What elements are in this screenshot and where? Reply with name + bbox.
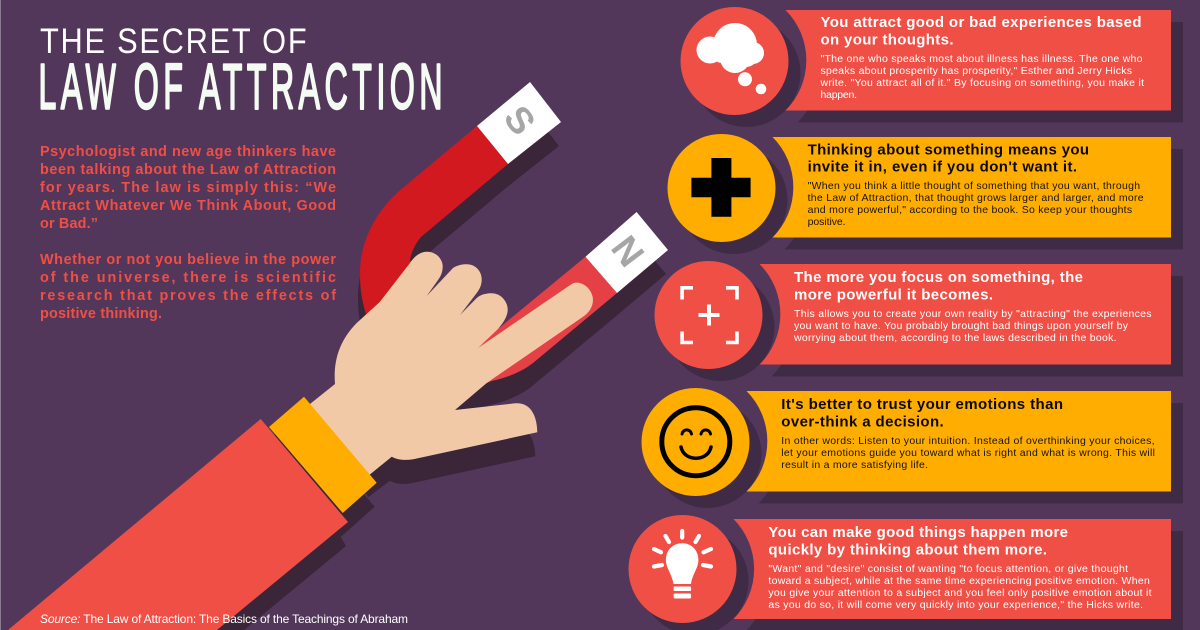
description: let your emotions guide you toward what is right and what is wrong. This will bbox=[781, 447, 1155, 459]
heading: It's better to trust your emotions than bbox=[781, 396, 1063, 413]
description bbox=[793, 308, 1152, 344]
description: as you do so, it will come very quickly into your experience," the Hicks write. bbox=[768, 599, 1143, 611]
panel: happen quickly bbox=[628, 515, 1183, 630]
heading: quickly by thinking about them more. bbox=[768, 542, 1047, 558]
panel: emotions bbox=[642, 388, 1183, 508]
text block: introduction: Attract Whatever We Think About, Good bbox=[40, 198, 336, 214]
heading bbox=[768, 524, 1068, 558]
illustration shadow bbox=[6, 106, 666, 630]
heading: Thinking about something means you bbox=[808, 142, 1089, 158]
text block: introduction: for years. The law is simply this: “We bbox=[40, 180, 336, 196]
magnet south cap bbox=[477, 82, 561, 164]
heading: more powerful it becomes. bbox=[794, 286, 993, 304]
icon: light bulb bbox=[654, 531, 711, 598]
description: positive. bbox=[808, 216, 846, 228]
description bbox=[820, 53, 1144, 101]
icon: smiley bbox=[662, 408, 730, 476]
description bbox=[781, 435, 1155, 471]
magnet bbox=[360, 82, 668, 390]
heading: invite it in, even if you don't want it. bbox=[808, 158, 1077, 176]
description: toward a subject, while at the same time experiencing positive emotion. When bbox=[768, 575, 1150, 587]
heading bbox=[808, 142, 1089, 176]
title: THE SECRET OF bbox=[40, 21, 307, 60]
source note: Source: The Law of Attraction: The Basics of the Teachings of Abraham bbox=[40, 612, 408, 626]
heading bbox=[820, 14, 1142, 48]
magnet north cap: N bbox=[603, 228, 652, 274]
text block: introduction: been talking about the Law of Attraction bbox=[40, 162, 336, 178]
description: speaks about prosperity has prosperity," Esther and Jerry Hicks bbox=[820, 65, 1132, 77]
title: LAW OF ATTRACTION bbox=[38, 50, 442, 123]
description: and more powerful," according to the book. So keep your thoughts bbox=[808, 204, 1132, 216]
heading bbox=[794, 269, 1083, 304]
description bbox=[768, 563, 1152, 611]
icon: plus bbox=[691, 158, 751, 217]
description: "The one who speaks most about illness has illness. The one who bbox=[820, 53, 1143, 65]
heading: You can make good things happen more bbox=[768, 524, 1068, 541]
heading: on your thoughts. bbox=[820, 32, 954, 48]
heading bbox=[781, 396, 1063, 430]
description: the Law of Attraction, that thought grows larger and larger, and more bbox=[808, 192, 1144, 204]
text block: introduction: or Bad.” bbox=[40, 216, 98, 232]
panel: focus bbox=[654, 261, 1183, 381]
description: you give your attention to a subject and you feel only positive emotion about it bbox=[768, 587, 1152, 599]
panel: invite bbox=[668, 134, 1183, 254]
heading: The more you focus on something, the bbox=[794, 269, 1083, 286]
magnet south cap: S bbox=[496, 98, 543, 142]
text block: introduction: of the universe, there is scientific bbox=[40, 270, 336, 286]
text block: introduction: Whether or not you believe in the power bbox=[40, 252, 336, 268]
description: "When you think a little thought of something that you want, through bbox=[808, 180, 1140, 192]
icon: thought cloud bbox=[696, 23, 766, 94]
magnet lower arm bbox=[470, 257, 617, 390]
description: happen. bbox=[820, 89, 857, 101]
heading: You attract good or bad experiences based bbox=[820, 14, 1142, 31]
description bbox=[808, 180, 1144, 228]
text block: introduction: positive thinking. bbox=[40, 306, 162, 322]
description: In other words: Listen to your intuition. Instead of overthinking your choices, bbox=[781, 435, 1155, 447]
text block: introduction: Psychologist and new age thinkers have bbox=[40, 144, 336, 160]
description: result in a more satisfying life. bbox=[781, 459, 928, 471]
magnet upper arm bbox=[360, 126, 508, 325]
magnet north cap bbox=[586, 212, 668, 293]
text block: introduction bbox=[40, 144, 336, 322]
description: This allows you to create your own reality by "attracting" the experiences bbox=[794, 308, 1152, 320]
description: worrying about them, according to the laws described in the book. bbox=[793, 332, 1116, 344]
panel: thoughts bbox=[680, 7, 1183, 127]
icon: focus frame bbox=[682, 288, 737, 342]
cuff bbox=[269, 397, 377, 513]
text block: introduction: research that proves the effects of bbox=[40, 288, 336, 304]
sleeve bbox=[8, 419, 348, 630]
description: you want to have. You probably brought bad things upon yourself by bbox=[794, 320, 1129, 332]
pointing hand bbox=[8, 252, 593, 630]
description: "Want" and "desire" consist of wanting "to focus attention, or give thought bbox=[768, 563, 1128, 575]
heading: over-think a decision. bbox=[781, 414, 944, 430]
description: write. "You attract all of it." By focusing on something, you make it bbox=[820, 77, 1144, 89]
hand bbox=[300, 252, 593, 481]
